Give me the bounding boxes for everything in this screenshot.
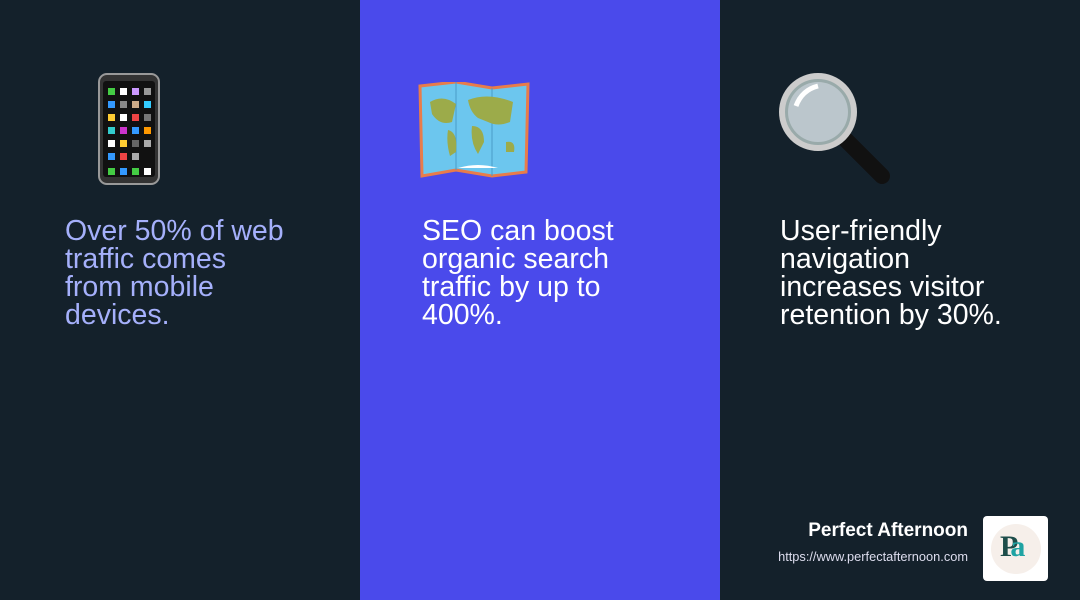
text: mobile stat (65, 215, 284, 331)
text: seo stat: traffic by up to (422, 271, 600, 303)
icon: magnifier (779, 73, 890, 184)
text: mobile stat: from mobile (65, 271, 214, 303)
logo: Pa (1000, 530, 1025, 563)
text: navigation stat: User-friendly (780, 215, 942, 247)
logo (983, 516, 1048, 581)
panel: mobile (0, 0, 360, 600)
text: mobile stat: traffic comes (65, 243, 226, 275)
icon: phone (98, 73, 160, 185)
footer: brand (778, 516, 1048, 581)
brand url: https://www.perfectafternoon.com (778, 549, 968, 564)
text: seo stat: SEO can boost (422, 215, 614, 247)
panel: seo (360, 0, 720, 600)
text: navigation stat: retention by 30%. (780, 299, 1002, 331)
text: navigation stat: increases visitor (780, 271, 984, 303)
text: navigation stat: navigation (780, 243, 910, 275)
text: navigation stat (780, 215, 1002, 331)
text: seo stat (422, 215, 614, 331)
text: mobile stat: devices. (65, 299, 170, 331)
icon: map (418, 82, 530, 178)
brand name: Perfect Afternoon (808, 520, 968, 541)
panel: navigation (720, 0, 1080, 600)
text: seo stat: 400%. (422, 299, 503, 331)
text: mobile stat: Over 50% of web (65, 215, 284, 247)
text: seo stat: organic search (422, 243, 609, 275)
